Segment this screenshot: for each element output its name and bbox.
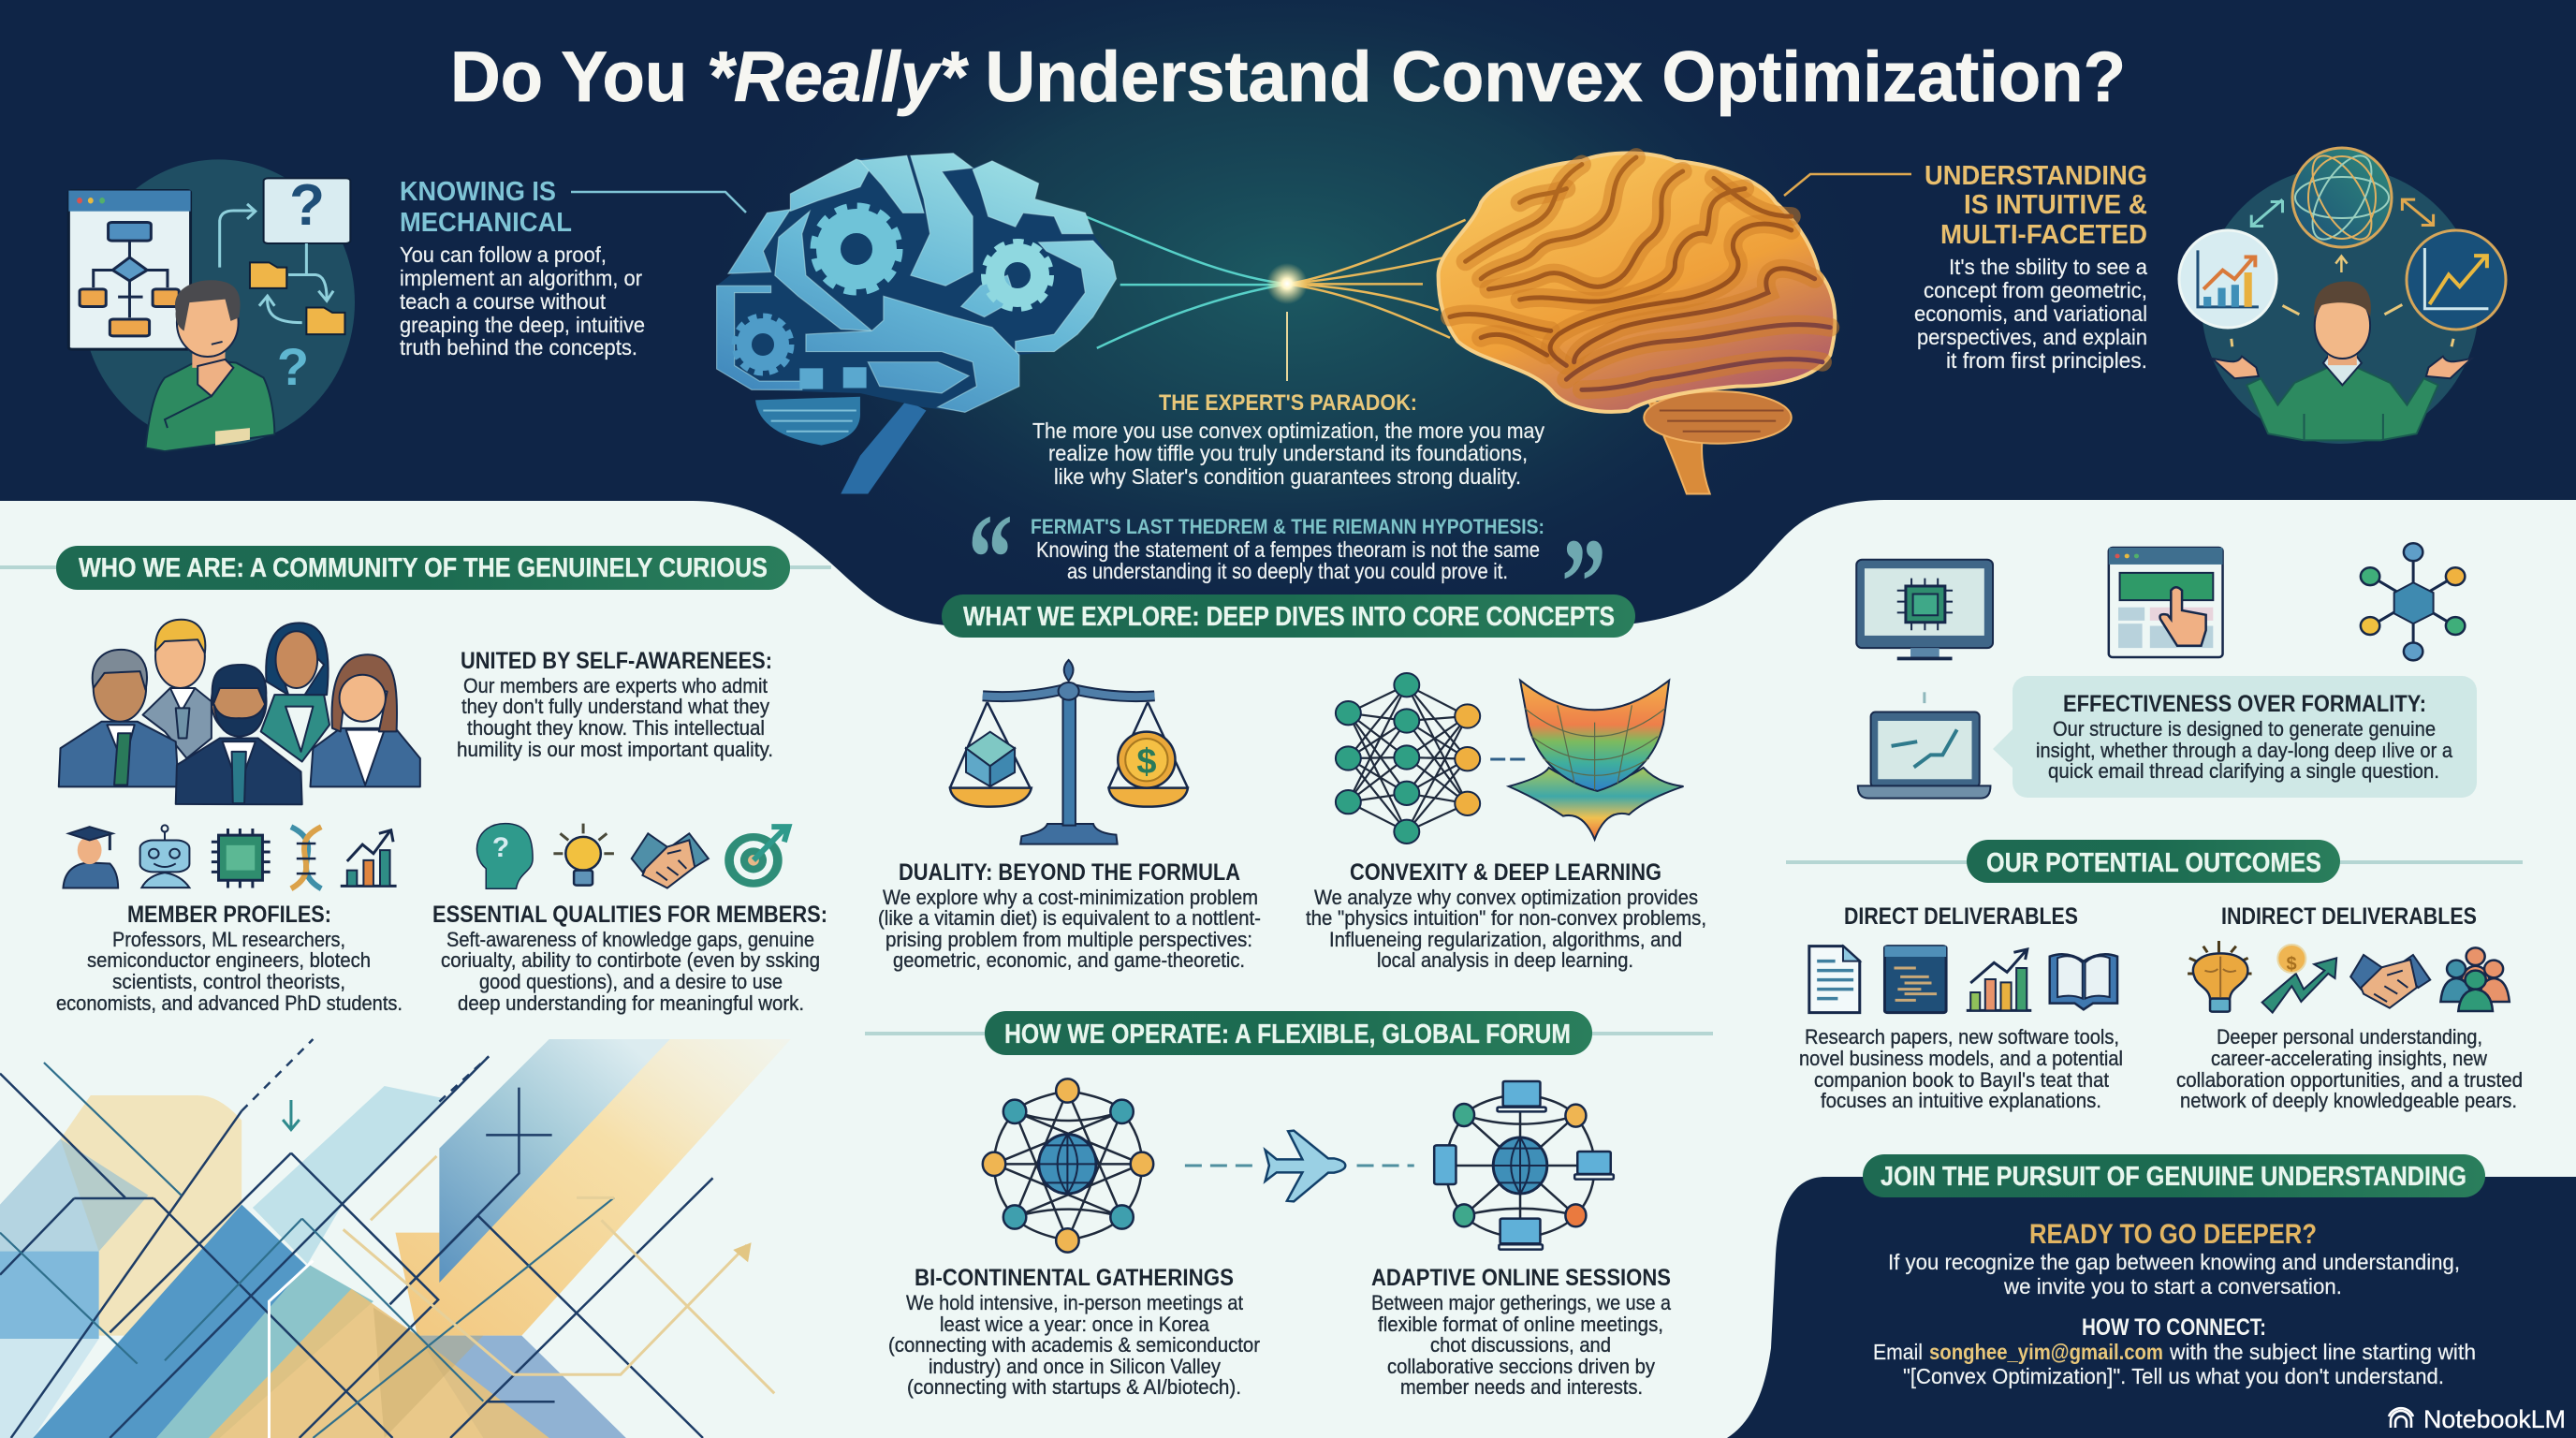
text: direct deliverables body: focuses an intuitive explanations. bbox=[1821, 1089, 2101, 1112]
text: duality: DUALITY: BEYOND THE FORMULA bbox=[899, 859, 1240, 886]
text: the expert's paradox: like why Slater's condition guarantees strong duality. bbox=[1054, 464, 1521, 489]
text: adaptive online sessions bbox=[1371, 1265, 1671, 1399]
text: knowing is mechanical body bbox=[400, 242, 645, 360]
text: united by self-awareness: thought they know. This intellectual bbox=[467, 716, 765, 740]
text: bi-continental gatherings bbox=[888, 1265, 1260, 1399]
text: essential qualities bbox=[432, 902, 827, 1015]
text: bi-continental gatherings: industry) and once in Silicon Valley bbox=[929, 1355, 1222, 1378]
text: convexity and deep learning: We analyze why convex optimization provides bbox=[1314, 886, 1698, 909]
pill: join the pursuit bbox=[1863, 1154, 2485, 1197]
illustration: knowing person with flowchart: ? bbox=[277, 337, 309, 396]
icon: global gathering network bbox=[983, 1078, 1153, 1253]
text: essential qualities: deep understanding for meaningful work. bbox=[458, 991, 804, 1015]
text: understanding body: It's the sbility to see a bbox=[1949, 255, 2147, 279]
pill: our potential outcomes: OUR POTENTIAL OUTCOMES bbox=[1986, 848, 2321, 878]
section rules bbox=[0, 567, 2523, 1034]
header glow bbox=[468, 0, 2106, 655]
callout: effectiveness over formality bbox=[1993, 676, 2477, 798]
heading: understanding is intuitive and multi-faceted bbox=[1925, 161, 2147, 250]
callout: effectiveness over formality: Our structure is designed to generate genuine bbox=[2053, 717, 2436, 741]
text: adaptive online sessions: chot discussions, and bbox=[1430, 1333, 1611, 1357]
text: bi-continental gatherings: (connecting with academis & semiconductor bbox=[888, 1333, 1260, 1357]
text: convexity and deep learning: Influeneing regularization, algorithms, and bbox=[1329, 928, 1682, 951]
heading: understanding is intuitive and multi-faceted: IS INTUITIVE & bbox=[1964, 190, 2147, 220]
callout: effectiveness over formality: quick email thread clarifying a single question. bbox=[2048, 759, 2439, 783]
text: ready to go deeper: READY TO GO DEEPER? bbox=[2029, 1219, 2317, 1250]
text: understanding body: perspectives, and explain bbox=[1917, 325, 2147, 349]
callout line: understanding bbox=[1784, 174, 1911, 196]
text: the expert's paradox: The more you use convex optimization, the more you may bbox=[1032, 418, 1544, 443]
text: how to connect bbox=[1873, 1314, 2476, 1388]
text: the expert's paradox: THE EXPERT'S PARADOK: bbox=[1159, 390, 1417, 416]
text: united by self-awareness: humility is our most important quality. bbox=[457, 738, 773, 761]
text: united by self-awareness: they don't fully understand what they bbox=[461, 695, 770, 718]
text: duality bbox=[878, 859, 1261, 972]
text: adaptive online sessions: member needs and interests. bbox=[1400, 1375, 1643, 1399]
heading: knowing is mechanical bbox=[400, 177, 572, 238]
text: adaptive online sessions: Between major getherings, we use a bbox=[1371, 1291, 1671, 1314]
text: indirect deliverables body: Deeper personal understanding, bbox=[2217, 1025, 2482, 1049]
brand: NotebookLM: NotebookLM bbox=[2423, 1405, 2566, 1433]
text: direct deliverables body bbox=[1799, 1025, 2123, 1112]
text: essential qualities: good questions), and a desire to use bbox=[479, 970, 783, 993]
icons: indirect deliverables: $ bbox=[2286, 954, 2297, 975]
text: ready to go deeper bbox=[1888, 1219, 2460, 1299]
icon: browser with pointing hand bbox=[2109, 548, 2223, 657]
text: member profiles: semiconductor engineers, blotech bbox=[87, 948, 371, 972]
heading: understanding is intuitive and multi-faceted: UNDERSTANDING bbox=[1925, 161, 2147, 191]
light content panel bbox=[0, 500, 2576, 1438]
pill: what we explore bbox=[942, 594, 1635, 638]
icons: essential qualities: ? bbox=[492, 832, 509, 863]
text: direct deliverables body: Research papers, new software tools, bbox=[1805, 1025, 2119, 1049]
icons: essential qualities bbox=[476, 824, 789, 888]
quote: fermat and riemann: FERMAT'S LAST THEDREM & THE RIEMANN HYPOTHESIS: bbox=[1031, 515, 1544, 538]
text: direct deliverables body: novel business models, and a potential bbox=[1799, 1047, 2123, 1070]
icon: monitor with chip bbox=[1856, 560, 1993, 660]
text: duality: (like a vitamin diet) is equivalent to a nottlent- bbox=[878, 906, 1261, 930]
callout line: knowing bbox=[571, 192, 746, 213]
text: essential qualities: ESSENTIAL QUALITIES FOR MEMBERS: bbox=[432, 902, 827, 928]
icon: orange organic brain bbox=[1439, 154, 1835, 493]
text: united by self-awareness: UNITED BY SELF-AWARENEES: bbox=[461, 648, 772, 674]
text: adaptive online sessions: flexible format of online meetings, bbox=[1378, 1313, 1663, 1336]
illustration: knowing person with flowchart: ? bbox=[289, 173, 325, 238]
icon: neural network bbox=[1336, 673, 1527, 844]
text: member profiles bbox=[56, 902, 402, 1015]
text: understanding body: it from first principles. bbox=[1946, 348, 2147, 373]
text: convexity and deep learning: the "physics intuition" for non-convex problems, bbox=[1306, 906, 1706, 930]
text: duality: prising problem from multiple perspectives: bbox=[886, 928, 1252, 951]
pill: who we are: WHO WE ARE: A COMMUNITY OF THE GENUINELY CURIOUS bbox=[79, 553, 768, 583]
text: member profiles: Professors, ML researchers, bbox=[112, 928, 345, 951]
text: member profiles: MEMBER PROFILES: bbox=[127, 902, 331, 928]
text: bi-continental gatherings: least wice a year: once in Korea bbox=[940, 1313, 1209, 1336]
quote: fermat and riemann: Knowing the statement of a fempes theoram is not the same bbox=[1036, 537, 1540, 562]
text: united by self-awareness: Our members are experts who admit bbox=[463, 674, 768, 697]
text: ready to go deeper: we invite you to start a conversation. bbox=[2003, 1274, 2342, 1299]
paradox connector line bbox=[1286, 312, 1288, 381]
text: understanding body: economis, and variational bbox=[1914, 301, 2147, 326]
callout: effectiveness over formality: insight, whether through a day-long deep ılive or a bbox=[2036, 739, 2452, 762]
illustration: knowing person with flowchart bbox=[68, 159, 355, 451]
text: how to connect: Email bbox=[1873, 1340, 1923, 1364]
icon: online device network bbox=[1434, 1081, 1614, 1250]
pill: our potential outcomes bbox=[1967, 840, 2340, 883]
title: Do You *Really* Understand Convex Optimization? bbox=[450, 37, 2126, 117]
text: knowing is mechanical body: You can follow a proof, bbox=[400, 242, 607, 267]
text: indirect deliverables body bbox=[2176, 1025, 2523, 1112]
quote: fermat and riemann: ” bbox=[1561, 513, 1606, 653]
text: understanding body bbox=[1914, 255, 2147, 373]
icon: laptop with chart bbox=[1858, 692, 1990, 799]
icon: blue mechanical brain bbox=[717, 154, 1117, 493]
text: ready to go deeper: If you recognize the gap between knowing and understanding, bbox=[1888, 1250, 2460, 1274]
text: bi-continental gatherings: We hold intensive, in-person meetings at bbox=[906, 1291, 1244, 1314]
heading: knowing is mechanical: MECHANICAL bbox=[400, 208, 572, 238]
text: knowing is mechanical body: teach a course without bbox=[400, 289, 607, 314]
text: indirect deliverables body: collaboration opportunities, and a trusted bbox=[2176, 1068, 2523, 1092]
text: understanding body: concept from geometric, bbox=[1924, 278, 2147, 302]
callout: effectiveness over formality: EFFECTIVENESS OVER FORMALITY: bbox=[2063, 691, 2426, 717]
text: knowing is mechanical body: truth behind the concepts. bbox=[400, 335, 637, 360]
icons: direct deliverables bbox=[1809, 946, 2117, 1013]
illustration: group of members bbox=[59, 620, 420, 804]
icon: balance scale: $ bbox=[1136, 742, 1157, 782]
quote: fermat and riemann: “ bbox=[968, 489, 1013, 628]
text: indirect deliverables body: career-accelerating insights, new bbox=[2211, 1047, 2488, 1070]
text: essential qualities: coriualty, ability to contirbote (even by ssking bbox=[441, 948, 820, 972]
text: convexity and deep learning bbox=[1306, 859, 1706, 972]
pill: join the pursuit: JOIN THE PURSUIT OF GENUINE UNDERSTANDING bbox=[1881, 1162, 2466, 1192]
pill: what we explore: WHAT WE EXPLORE: DEEP DIVES INTO CORE CONCEPTS bbox=[963, 602, 1615, 632]
text: convexity and deep learning: local analysis in deep learning. bbox=[1377, 948, 1633, 972]
heading: knowing is mechanical: KNOWING IS bbox=[400, 177, 556, 207]
focal point bbox=[1266, 263, 1308, 304]
text: member profiles: scientists, control theorists, bbox=[112, 970, 345, 993]
illustration: understanding person with three perspectives bbox=[2179, 147, 2506, 444]
background geometric art bbox=[0, 1039, 791, 1438]
icons: member profiles bbox=[63, 825, 397, 888]
text: duality: We explore why a cost-minimization problem bbox=[883, 886, 1258, 909]
icon: hub network bbox=[2361, 543, 2465, 660]
text: united by self-awareness bbox=[457, 648, 773, 761]
icons: indirect deliverables bbox=[2188, 941, 2510, 1013]
heading: direct deliverables: DIRECT DELIVERABLES bbox=[1844, 903, 2078, 930]
text: knowing is mechanical body: greaping the deep, intuitive bbox=[400, 313, 645, 337]
icon: airplane with dashed route bbox=[1185, 1131, 1414, 1201]
text: adaptive online sessions: ADAPTIVE ONLINE SESSIONS bbox=[1371, 1265, 1671, 1291]
text: the expert's paradox bbox=[1032, 390, 1544, 489]
pill: who we are bbox=[56, 546, 790, 590]
text: duality: geometric, economic, and game-theoretic. bbox=[893, 948, 1245, 972]
text: indirect deliverables body: network of deeply knowledgeable pears. bbox=[2180, 1089, 2517, 1112]
pill: how we operate: HOW WE OPERATE: A FLEXIBLE, GLOBAL FORUM bbox=[1004, 1020, 1571, 1049]
text: bi-continental gatherings: BI-CONTINENTAL GATHERINGS bbox=[915, 1265, 1234, 1291]
text: essential qualities: Seft-awareness of knowledge gaps, genuine bbox=[446, 928, 814, 951]
text: direct deliverables body: companion book to Bayıl's teat that bbox=[1814, 1068, 2110, 1092]
quote: fermat and riemann: as understanding it so deeply that you could prove it. bbox=[1067, 559, 1508, 583]
icon: optimization surface bbox=[1509, 681, 1684, 840]
quote: fermat and riemann bbox=[968, 489, 1606, 653]
heading: understanding is intuitive and multi-faceted: MULTI-FACETED bbox=[1940, 220, 2147, 250]
text: bi-continental gatherings: (connecting with startups & AI/biotech). bbox=[907, 1375, 1241, 1399]
connection lines: brains to focal point bbox=[1085, 216, 1466, 348]
pill: how we operate bbox=[985, 1011, 1592, 1055]
text: how to connect: HOW TO CONNECT: bbox=[2082, 1314, 2266, 1341]
text: adaptive online sessions: collaborative seccions driven by bbox=[1387, 1355, 1656, 1378]
text: convexity and deep learning: CONVEXITY & DEEP LEARNING bbox=[1350, 859, 1661, 886]
text: member profiles: economists, and advanced PhD students. bbox=[56, 991, 402, 1015]
text: knowing is mechanical body: implement an algorithm, or bbox=[400, 266, 642, 290]
text: how to connect: with the subject line starting with bbox=[2169, 1340, 2476, 1364]
text: the expert's paradox: realize how tiffle you truly understand its foundations, bbox=[1048, 441, 1528, 465]
text: how to connect: "[Convex Optimization]". Tell us what you don't understand. bbox=[1903, 1364, 2444, 1388]
icon: balance scale bbox=[950, 660, 1188, 844]
panel: call to action bbox=[1727, 1177, 2576, 1438]
text: how to connect: songhee_yim@gmail.com bbox=[1929, 1340, 2163, 1364]
heading: indirect deliverables: INDIRECT DELIVERABLES bbox=[2221, 903, 2477, 930]
